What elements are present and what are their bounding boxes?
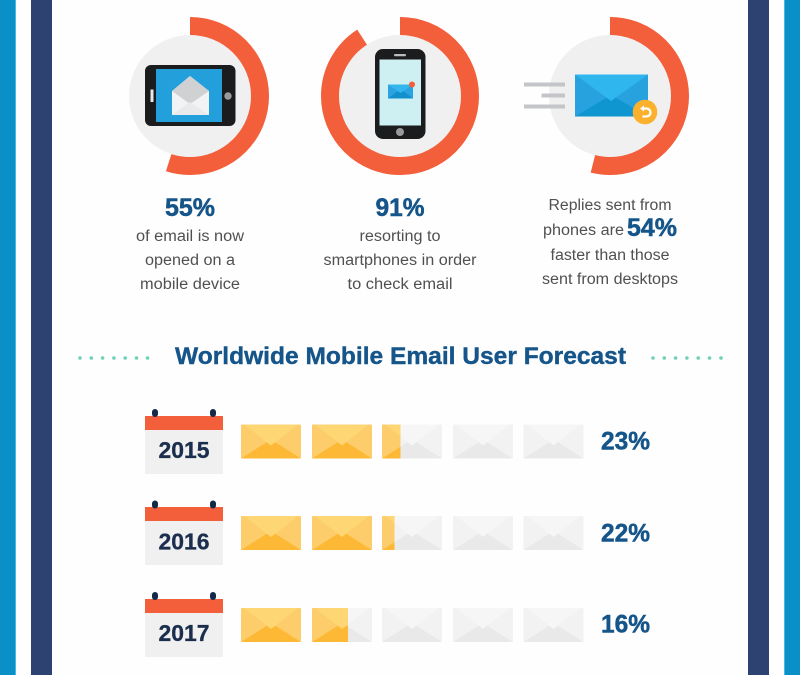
heading: forecast xyxy=(78,343,723,370)
icon: smartphone with envelope xyxy=(375,49,426,139)
stat text: 91%: resorting to xyxy=(360,228,440,245)
stat text: 55%: mobile device xyxy=(140,276,240,293)
stat text: 55%: 55% xyxy=(165,194,215,222)
donut: 91 percent xyxy=(330,26,470,166)
right border bands xyxy=(748,0,800,675)
row: 2017 forecast xyxy=(145,592,650,657)
stat text: 91%: to check email xyxy=(348,276,452,293)
stat text: 54% faster: phones are xyxy=(543,222,624,239)
stat text: 54% faster: sent from desktops xyxy=(542,271,678,288)
icon: calendar 2015: 2015 xyxy=(158,437,210,463)
stat text: 54% faster: 54% xyxy=(627,214,677,242)
icon: calendar 2016: 2016 xyxy=(158,528,210,554)
value: 23%: 23% xyxy=(601,428,650,456)
stat text: 55% xyxy=(136,194,245,293)
donut: 55 percent xyxy=(120,26,260,166)
stat text: 55%: opened on a xyxy=(145,252,235,269)
stat text: 55%: of email is now xyxy=(136,228,245,245)
panel: replies 54% faster xyxy=(524,26,680,288)
envelopes: 2015 scale xyxy=(241,424,584,458)
icon: calendar 2017: 2017 xyxy=(158,620,210,646)
stat text: 54% faster: Replies sent from xyxy=(548,197,672,214)
icon: blue envelope with reply badge xyxy=(575,74,657,124)
stat text: 54% faster: faster than those xyxy=(550,247,670,264)
value: 16%: 16% xyxy=(601,610,650,638)
stat text: 91%: smartphones in order xyxy=(324,252,476,269)
left border bands xyxy=(0,0,52,675)
envelopes: 2016 scale xyxy=(241,516,584,550)
icon: calendar 2016 xyxy=(145,500,223,565)
panel: 55% email opened on mobile xyxy=(120,26,260,293)
icon: tablet with open envelope xyxy=(145,65,236,126)
stat text: 54% faster xyxy=(542,197,678,288)
icon: calendar 2015 xyxy=(145,409,223,474)
donut: 54 percent xyxy=(540,26,680,166)
heading: forecast: Worldwide Mobile Email User Forecast xyxy=(175,343,626,370)
panel: 91% resort to smartphones xyxy=(324,26,476,293)
icon: speed lines xyxy=(524,82,565,108)
envelopes: 2017 scale xyxy=(241,608,584,642)
value: 22%: 22% xyxy=(601,520,650,548)
stat text: 91% xyxy=(324,194,476,293)
row: 2016 forecast xyxy=(145,500,650,565)
row: 2015 forecast xyxy=(145,409,650,474)
stat text: 91%: 91% xyxy=(376,194,424,222)
icon: calendar 2017 xyxy=(145,592,223,657)
